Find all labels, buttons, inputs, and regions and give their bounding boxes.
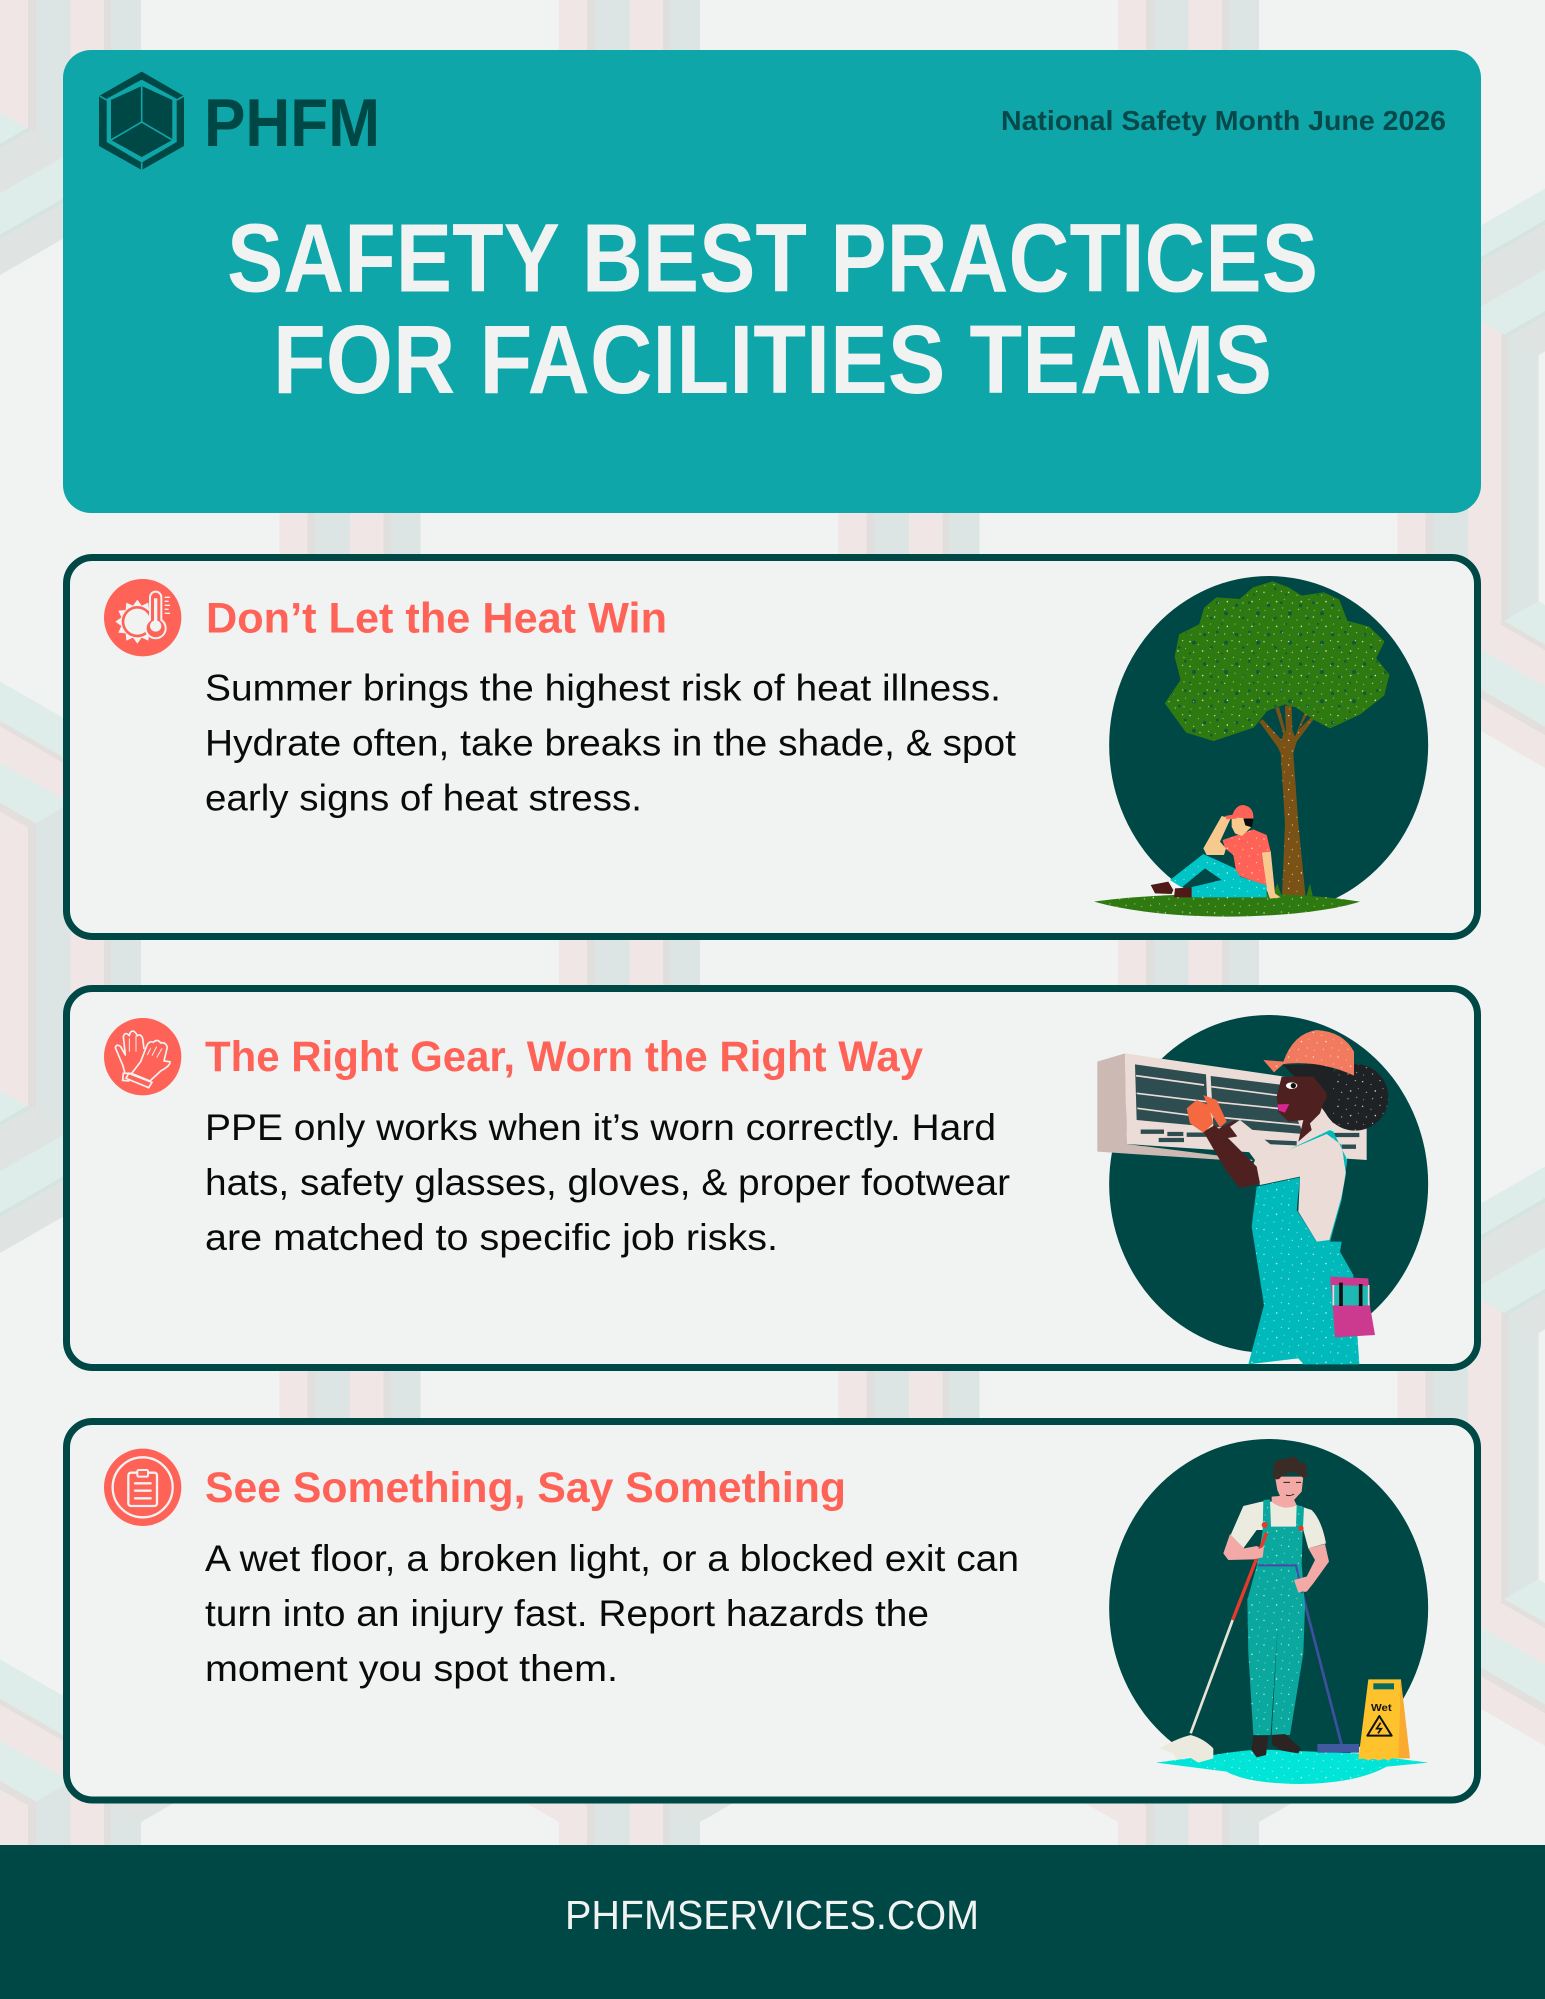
panel: hazard reporting card (66, 1422, 1478, 1800)
heading: Don’t Let the Heat Win (206, 595, 667, 643)
footer bar (0, 1845, 1545, 1999)
text block: Hydrate often, take breaks in the shade, & spot (205, 723, 1017, 764)
text block (205, 1538, 1019, 1689)
panel: heat safety card (66, 558, 1478, 936)
text block: turn into an injury fast. Report hazards the (205, 1593, 929, 1634)
text block: are matched to specific job risks. (205, 1217, 778, 1258)
heading: See Something, Say Something (205, 1464, 846, 1512)
panel: PPE gear card (66, 988, 1478, 1368)
illustration: cleaner mopping beside a wet floor sign (1109, 1439, 1428, 1784)
logo: PHFM hexagon mark and wordmark (99, 72, 380, 170)
text block: A wet floor, a broken light, or a blocked exit can (205, 1538, 1019, 1579)
heading: The Right Gear, Worn the Right Way (205, 1033, 923, 1081)
text block (205, 668, 1017, 819)
text block: hats, safety glasses, gloves, & proper footwear (205, 1162, 1010, 1203)
title: SAFETY BEST PRACTICES (227, 204, 1318, 312)
icon: safety gloves (104, 1018, 181, 1095)
text block: moment you spot them. (205, 1648, 618, 1689)
text block: PPE only works when it’s worn correctly. Hard (205, 1107, 996, 1148)
illustration: worker resting under a tree (1094, 576, 1428, 917)
text block (205, 1107, 1010, 1258)
panel: header banner (63, 50, 1481, 513)
sign label: Wet (1371, 1703, 1392, 1714)
title (227, 204, 1318, 414)
text block: early signs of heat stress. (205, 778, 642, 819)
footer website address: PHFMSERVICES.COM (565, 1892, 979, 1938)
illustration: technician servicing an air conditioner (1097, 1015, 1428, 1364)
icon: clipboard (104, 1449, 181, 1526)
text block: Summer brings the highest risk of heat illness. (205, 668, 1001, 709)
icon: sun and thermometer (104, 579, 181, 656)
text: national safety month date: National Safety Month June 2026 (1001, 105, 1446, 136)
title: FOR FACILITIES TEAMS (273, 305, 1272, 414)
logo: PHFM hexagon mark and wordmark: PHFM (204, 85, 380, 161)
